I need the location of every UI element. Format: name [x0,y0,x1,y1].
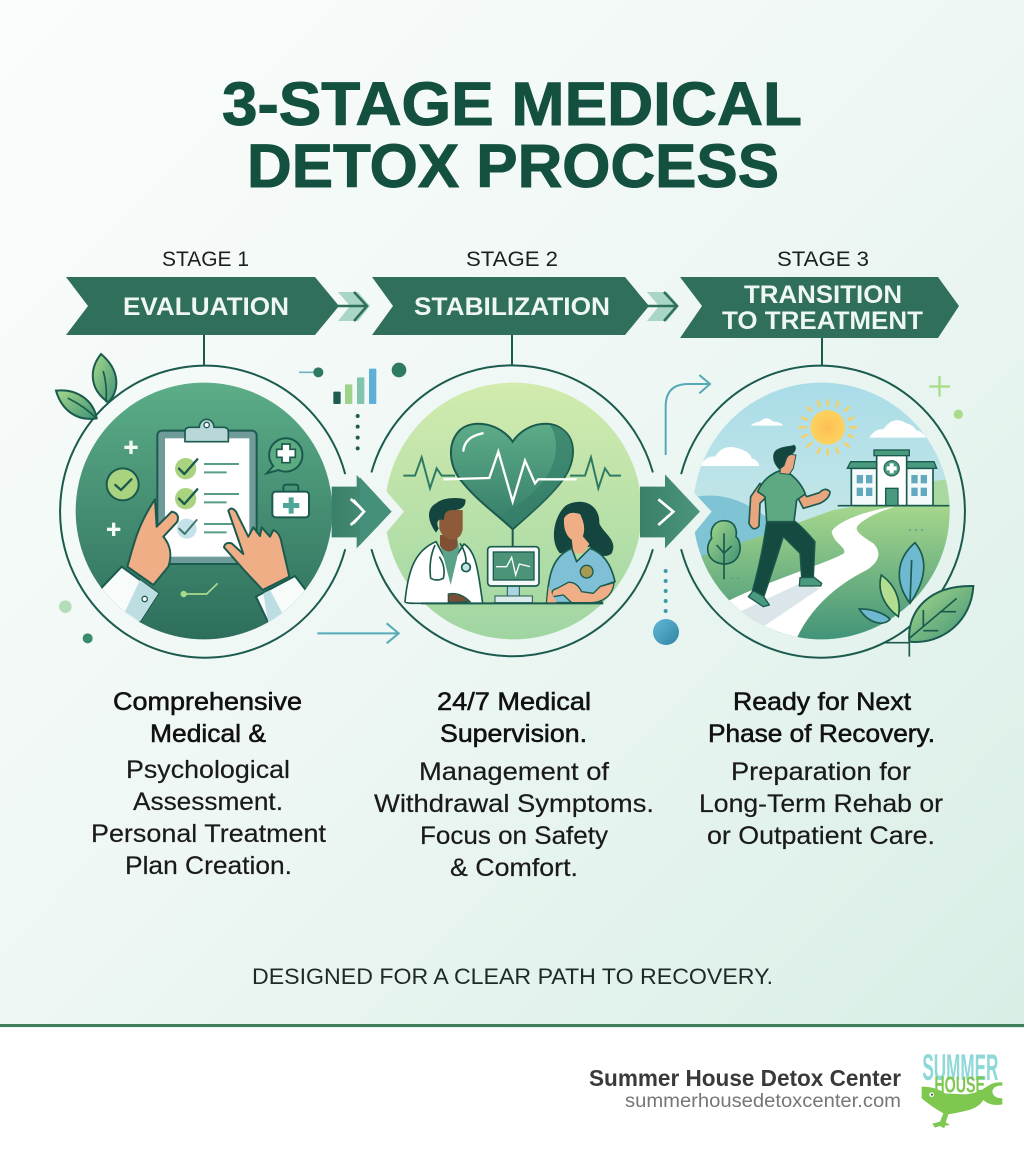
stem lines [204,335,822,366]
text: stage 2 description: Supervision. [440,720,587,748]
circle 1: evaluation illustration [56,354,399,658]
text: stage 1 description: Comprehensive [113,688,302,716]
footer band [0,1024,1024,1154]
stage 1 label: STAGE 1 [162,248,249,271]
inner disc [385,383,642,639]
figure: nurse [547,502,615,603]
banner: stabilization [372,277,649,335]
icon: monitor [488,547,539,603]
icon: plus signs [107,441,138,536]
notch for arrow 2 [688,487,712,540]
pulse line [403,452,621,502]
banner: transition to treatment: TO TREATMENT [722,307,923,335]
sparkle and dot [929,376,963,419]
inner disc [76,383,332,639]
banner: transition to treatment: TRANSITION [744,281,902,309]
outer ring [372,365,653,656]
stage 2 label: STAGE 2 [466,248,558,271]
scene disc [690,380,953,643]
text: stage 1 description: Plan Creation. [125,852,292,880]
text: stage 1 description: Psychological [126,756,290,784]
dotted line and ball [653,569,679,645]
notch for arrow [380,484,404,540]
arrow under circle 1 [317,623,399,643]
text: stage 3 description: or Outpatient Care. [707,822,935,850]
text: stage 2 description: 24/7 Medical [437,688,591,716]
decorative dots left [59,600,93,643]
text: stage 2 description: & Comfort. [450,854,578,882]
circle 2: stabilization illustration [353,363,653,656]
icon: tree [708,521,740,579]
text: stage 1 description [91,688,326,880]
text: stage 2 description: Management of [419,758,609,786]
outer ring [681,366,965,658]
icon: clipboard [157,419,257,564]
outer ring [60,366,345,658]
mini bar chart [299,367,376,450]
chevrons between stage 1 and 2 [338,292,370,321]
title: DETOX PROCESS [247,132,779,200]
title [222,70,802,200]
logo: summer house gecko [922,1046,1002,1128]
text: stage 2 description: Withdrawal Symptoms. [374,790,654,818]
text: stage 3 description: Phase of Recovery. [708,720,935,748]
banner: evaluation: EVALUATION [123,293,289,321]
icon: left hand and cuff [100,498,179,622]
text: stage 2 description: Focus on Safety [420,822,609,850]
stage 3 label: STAGE 3 [777,248,869,271]
title: 3-STAGE MEDICAL [222,70,802,138]
footer url: summerhousedetoxcenter.com [625,1091,901,1112]
tagline: DESIGNED FOR A CLEAR PATH TO RECOVERY. [252,964,773,989]
ground [690,506,953,643]
circle 3: transition illustration [640,366,973,658]
icon: small trend line [181,583,218,596]
small ground dots [731,529,923,579]
text: stage 3 description: Ready for Next [733,688,911,716]
icon: foreground leaves [859,543,973,657]
figure: walking man [748,445,830,607]
footer brand name: Summer House Detox Center [589,1065,901,1091]
table line [421,600,603,606]
dot top [392,363,406,377]
banner: evaluation [66,277,339,335]
icon: right hand and cuff [223,508,306,623]
text: stage 1 description: Medical & [150,720,266,748]
icon: speech bubble with cross [267,438,302,473]
hills [694,496,766,574]
banner: stabilization: STABILIZATION [414,293,610,321]
icon: top leaves [56,354,116,419]
icon: heart [451,424,573,529]
icon: sun [798,399,857,455]
logo: summer house gecko: HOUSE [934,1071,985,1097]
text: stage 1 description: Assessment. [133,788,283,816]
road [727,507,895,638]
transition arrow 1 [332,475,392,548]
chevrons between stage 2 and 3 [647,292,679,321]
text: stage 2 description [374,688,654,882]
text: stage 3 description: Preparation for [731,758,911,786]
icon: first aid kit [272,485,309,517]
heart monitor group [403,424,621,547]
text: stage 3 description [699,688,943,850]
text: stage 1 description: Personal Treatment [91,820,326,848]
transition arrow 2 [640,474,700,548]
arrow tip overlay [360,477,392,545]
banner: transition to treatment [680,277,959,338]
figure: doctor [405,498,483,603]
curved arrow [666,375,710,455]
building [838,450,949,506]
icon: check badge [107,468,139,500]
icon: clouds [700,418,926,466]
text: stage 3 description: Long-Term Rehab or [699,790,943,818]
